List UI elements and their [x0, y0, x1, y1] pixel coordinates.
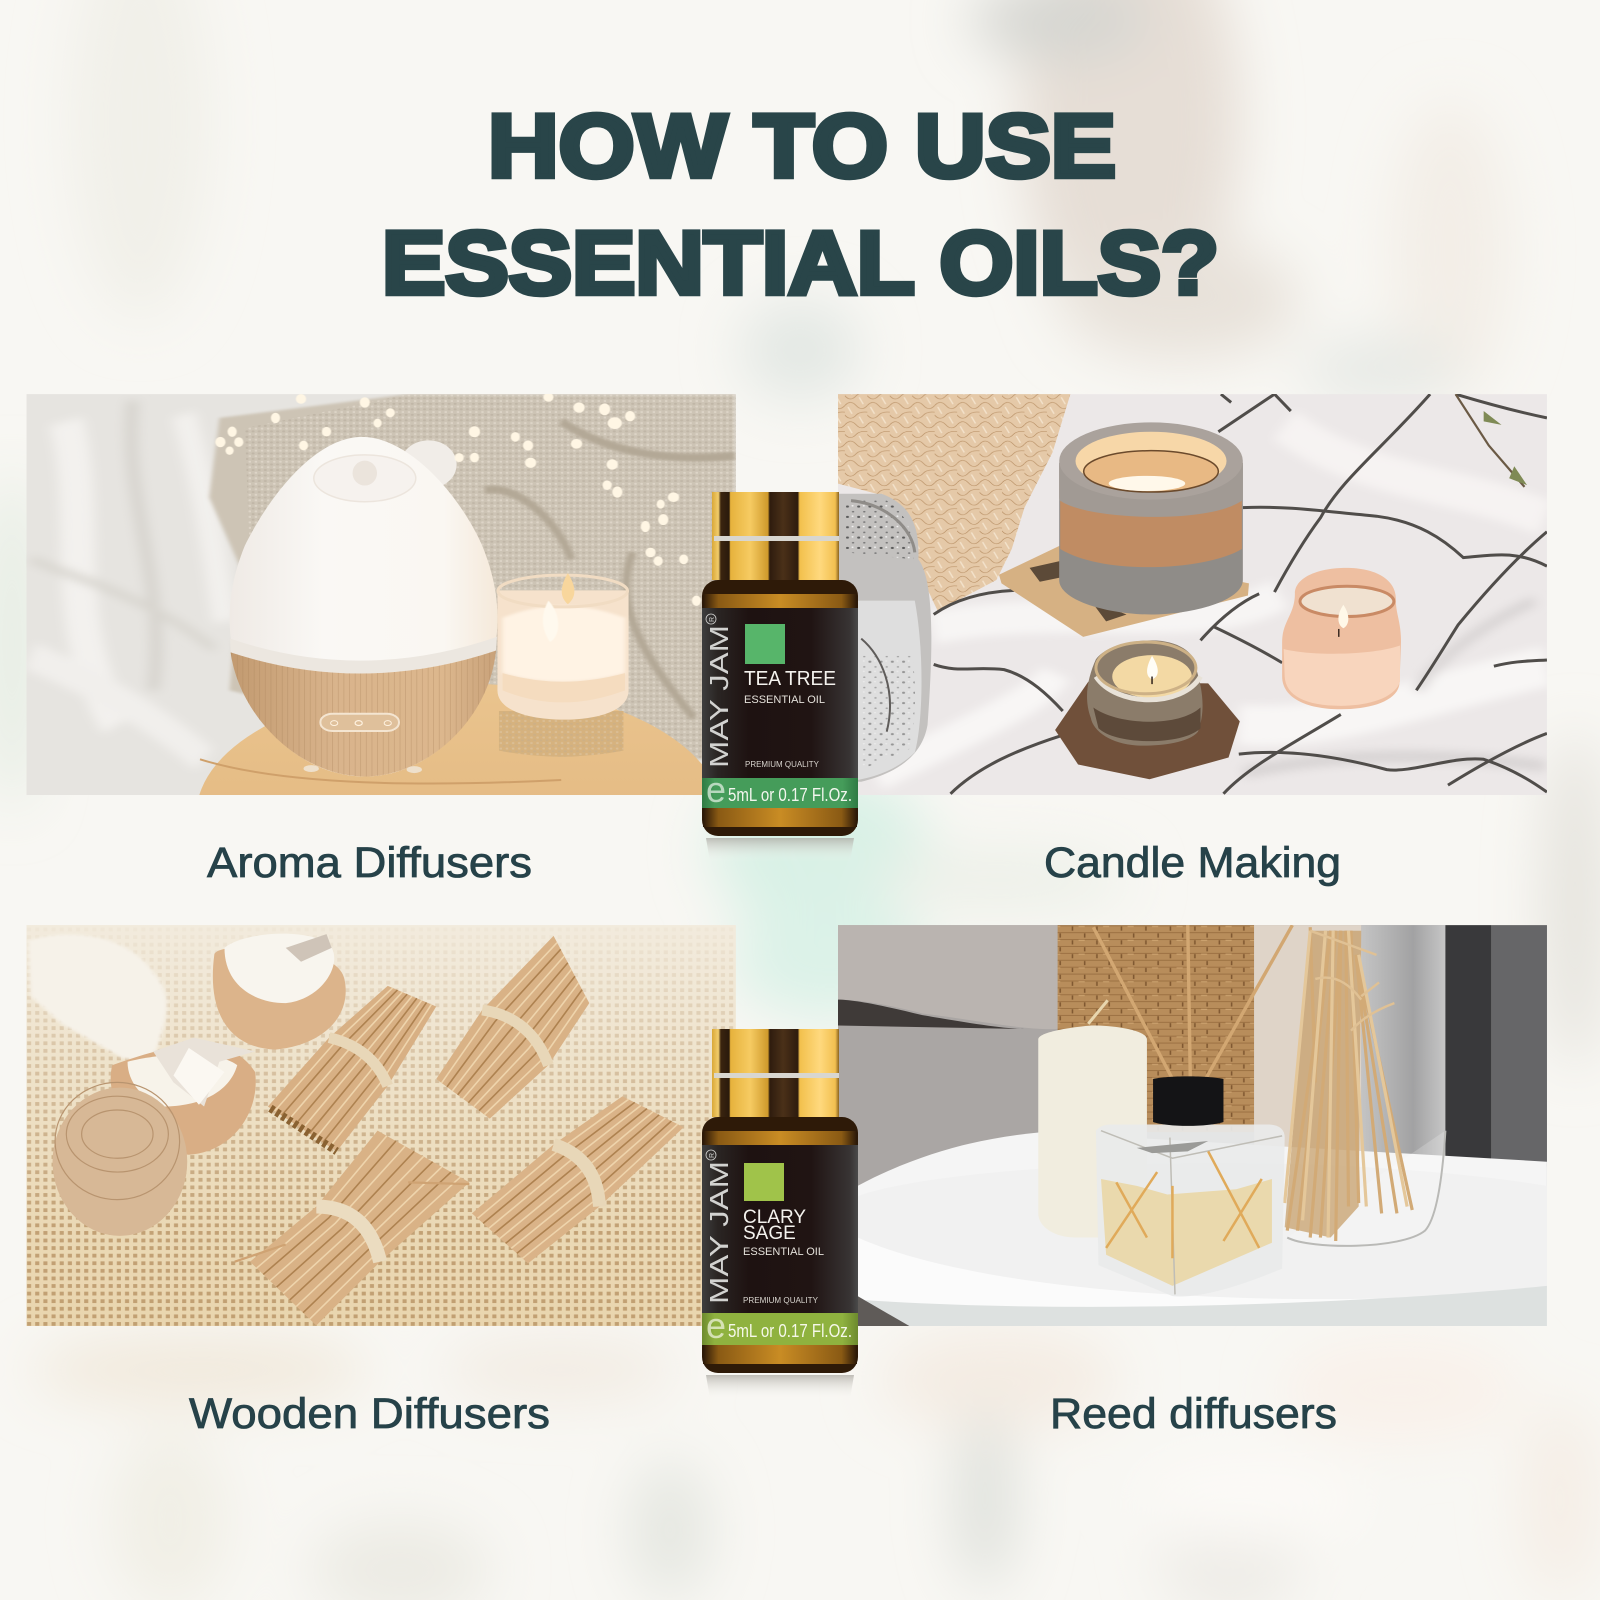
reed bundle 2 [436, 936, 589, 1119]
fairy lights [215, 393, 701, 606]
woven basket [837, 394, 1070, 611]
upper amber band [703, 594, 857, 609]
reed bundle 4 [472, 1096, 684, 1263]
cap silver ring [714, 536, 839, 541]
wooden table [199, 684, 702, 795]
registered mark: R [709, 1153, 716, 1158]
cap silver ring [714, 1073, 839, 1078]
bottle: tea tree [702, 492, 858, 862]
label: wooden diffusers: Wooden Diffusers [189, 1390, 550, 1438]
lower amber band [703, 1345, 857, 1364]
bottle reflection [706, 838, 854, 862]
wooden disc [53, 1082, 187, 1236]
reed sticks [1093, 925, 1292, 1079]
bottle body [702, 1117, 858, 1373]
e mark: e [706, 769, 726, 810]
colour swatch [745, 624, 785, 664]
wicker basket [1058, 925, 1254, 1132]
brand name: MAY JAM [704, 625, 734, 768]
small glass candle [1087, 640, 1203, 746]
reed bundle 1 [268, 986, 436, 1151]
registered mark [706, 1150, 716, 1160]
oil name: TEA TREE [744, 668, 836, 690]
volume text: 5mL or 0.17 Fl.Oz. [728, 1321, 852, 1341]
e mark: e [706, 1305, 726, 1346]
brand name: MAY JAM [704, 1161, 734, 1304]
straw in vase [1285, 927, 1412, 1241]
twig [1456, 394, 1524, 487]
pillow shadow [837, 1000, 1024, 1029]
diffuser [230, 437, 497, 777]
label: reed diffusers: Reed diffusers [1050, 1390, 1337, 1438]
panel: aroma diffusers photo [26, 394, 736, 795]
curtain [1361, 925, 1547, 1173]
white tulle [28, 934, 167, 1062]
vase base outline [1287, 1131, 1445, 1246]
bottle cap [712, 1029, 839, 1117]
sheet grid lines [934, 394, 1547, 794]
reed diffuser bottle [1096, 1076, 1285, 1297]
registered mark: R [709, 617, 716, 622]
title [382, 96, 1219, 312]
grey pillow [837, 925, 1058, 1029]
octagon coaster [1055, 682, 1240, 779]
oil name: CLARY [743, 1207, 806, 1228]
lower amber band [703, 808, 857, 827]
essential oil text: ESSENTIAL OIL [743, 1246, 824, 1258]
bottle cap [712, 492, 839, 580]
panel: wooden diffusers photo [27, 925, 736, 1326]
volume text: 5mL or 0.17 Fl.Oz. [728, 785, 852, 805]
diffuser buttons [320, 714, 399, 731]
green volume band [702, 1313, 858, 1345]
glass jar [837, 494, 931, 782]
label: candle making: Candle Making [1044, 839, 1341, 887]
panel: candle making photo [837, 394, 1547, 795]
bottle: clary sage [702, 1029, 858, 1399]
title: HOW TO USE [488, 96, 1116, 196]
oil name: SAGE [743, 1223, 796, 1244]
essential oil text: ESSENTIAL OIL [744, 694, 825, 706]
lower wooden cup [111, 1038, 256, 1155]
glass vase [1254, 925, 1361, 1151]
pink candle [1282, 568, 1401, 709]
premium quality text: PREMIUM QUALITY [743, 1295, 818, 1305]
cement and cork pot [1059, 422, 1243, 614]
dark label [702, 608, 858, 778]
label: aroma diffusers: Aroma Diffusers [207, 839, 532, 887]
title: ESSENTIAL OILS? [382, 212, 1219, 312]
pillar candle [1038, 1000, 1147, 1238]
dark label [702, 1145, 858, 1313]
bottle body [702, 580, 858, 836]
upper wooden cup [213, 934, 346, 1050]
buds [1484, 411, 1527, 485]
wooden tray [999, 546, 1249, 637]
colour swatch [744, 1163, 784, 1201]
green volume band [702, 778, 858, 808]
sheet folds [877, 425, 1547, 777]
bedsheet cloth [31, 401, 224, 759]
premium quality text: PREMIUM QUALITY [745, 759, 819, 769]
white round tray [858, 1132, 1547, 1326]
panel: reed diffusers photo [837, 925, 1547, 1326]
reed bundle 3 [235, 1131, 469, 1325]
knitted blanket [209, 394, 736, 759]
registered mark [706, 614, 716, 624]
glass candle [497, 573, 629, 757]
bottle reflection [706, 1375, 854, 1399]
upper amber band [703, 1131, 857, 1146]
